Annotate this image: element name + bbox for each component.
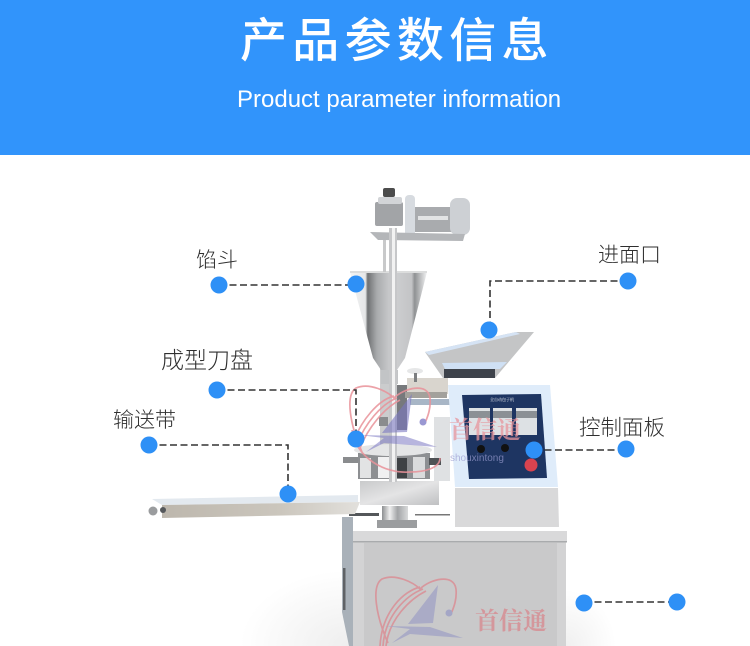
forming cutter disc (343, 444, 441, 479)
filling hopper (350, 271, 427, 384)
callout dots (140, 272, 686, 612)
conveyor bracket (360, 481, 439, 505)
label: forming cutter: 成型刀盘 (161, 347, 253, 373)
flour inlet hopper (425, 332, 534, 378)
watermark: lower brand name: 首信通 (475, 608, 547, 635)
control panel: 全自动包子机 (490, 396, 514, 402)
vertical drive shaft (389, 228, 397, 482)
control box (448, 385, 559, 527)
watermark: upper brand name (449, 417, 521, 464)
header band (0, 0, 750, 155)
label: flour inlet: 进面口 (598, 244, 661, 267)
watermark: lower logo (376, 577, 463, 646)
control panel (462, 394, 547, 479)
central column (349, 365, 450, 528)
watermark: upper brand name: 首信通 (449, 417, 521, 444)
subtitle: Product parameter information (237, 86, 561, 113)
label: filling hopper: 馅斗 (196, 249, 238, 272)
label: control panel: 控制面板 (579, 416, 665, 440)
machine base cabinet (342, 517, 567, 646)
label: conveyor belt: 输送带 (113, 409, 176, 432)
watermark: upper brand name: shouxintong (450, 453, 504, 464)
watermark: upper logo (350, 386, 440, 472)
drive motor (370, 188, 470, 272)
callout leader lines (149, 281, 677, 602)
conveyor belt (148, 495, 360, 518)
title: 产品参数信息 (240, 14, 554, 67)
